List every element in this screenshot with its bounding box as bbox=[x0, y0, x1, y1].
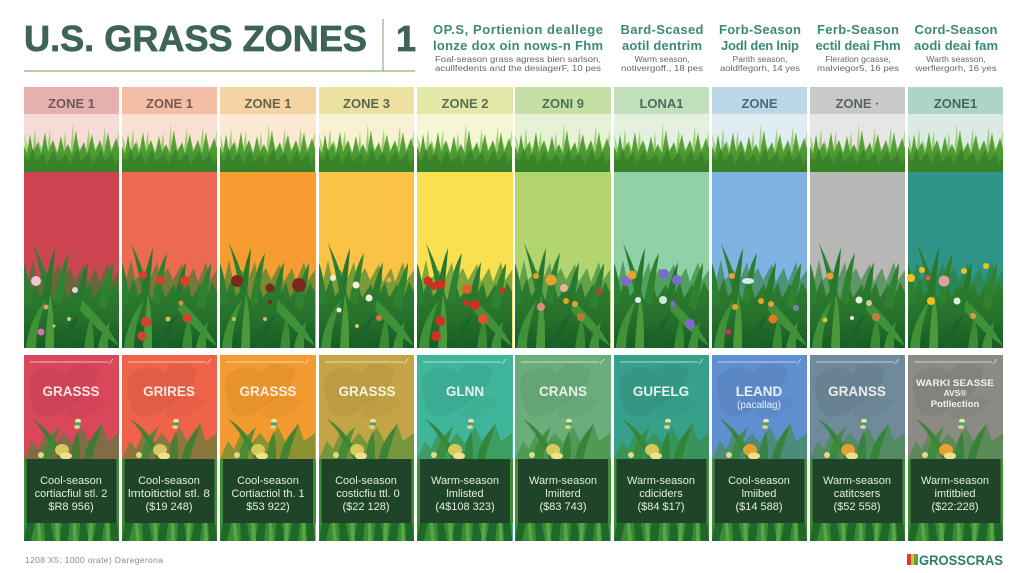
zone details: ($84 $17) bbox=[637, 501, 685, 513]
zone label: ZONE 3 bbox=[343, 96, 390, 111]
zone label: ZONE · bbox=[835, 96, 880, 111]
header column: Ferb-Season: ectil deai Fhm bbox=[816, 38, 900, 53]
zone column 1 bbox=[24, 87, 119, 348]
zone details bbox=[26, 459, 116, 523]
header column: Ferb-Season: Fleration gcasse, bbox=[825, 54, 891, 64]
zone label: ZONE1 bbox=[934, 96, 977, 111]
zone details: Cool-season bbox=[40, 475, 102, 487]
zone details: cdiciders bbox=[639, 488, 683, 500]
header column: Bard-Scased: aotil dentrim bbox=[622, 38, 702, 53]
intro text block: lonze dox oin nows-n Fhm bbox=[433, 38, 603, 53]
zone label: ZONE 2 bbox=[442, 96, 488, 111]
zone details bbox=[616, 459, 706, 523]
info panel 5 bbox=[417, 355, 513, 541]
zone details: ($22 128) bbox=[342, 501, 390, 513]
zone column 8 bbox=[712, 87, 807, 348]
grass name: AVS® bbox=[943, 388, 967, 398]
zone details bbox=[714, 459, 804, 523]
intro text block: acullfedents and the desiagerF, 10 pes bbox=[435, 63, 601, 73]
header column: Bard-Scased bbox=[620, 22, 704, 73]
header column: Forb-Season: Jodl den lnip bbox=[721, 38, 799, 53]
zone column 2 bbox=[122, 87, 217, 348]
header column: Ferb-Season: Ferb-Season bbox=[817, 22, 899, 37]
zone number: 1 bbox=[396, 18, 416, 59]
info panel 6 bbox=[515, 355, 611, 541]
zone details: Cortiactiol th. 1 bbox=[231, 488, 305, 500]
flowers bbox=[533, 273, 602, 321]
zone details: (4$108 323) bbox=[435, 501, 495, 513]
grass name: LEAND bbox=[736, 384, 782, 399]
zone details: ($83 743) bbox=[539, 501, 587, 513]
grass name bbox=[736, 384, 782, 411]
flowers bbox=[231, 275, 306, 321]
grass name: GRANSS bbox=[828, 384, 886, 399]
zone details bbox=[223, 459, 313, 523]
header column: Bard-Scased: Bard-Scased bbox=[620, 22, 704, 37]
grass name: GRASSS bbox=[338, 384, 396, 399]
header column: Ferb-Season bbox=[816, 22, 900, 73]
flowers bbox=[330, 275, 392, 328]
info panel 4 bbox=[319, 355, 414, 541]
grass name: (pacallag) bbox=[737, 400, 781, 411]
zone details: ($19 248) bbox=[145, 501, 193, 513]
intro text block bbox=[433, 22, 603, 73]
zone label: ZONI 9 bbox=[542, 96, 584, 111]
zone details: ($52 558) bbox=[833, 501, 881, 513]
zone details: ($22:228) bbox=[931, 501, 979, 513]
header column: Cord-Season: Cord-Season bbox=[914, 22, 998, 37]
zone details: lmlisted bbox=[446, 488, 484, 500]
zone details: $R8 956) bbox=[48, 501, 94, 513]
zone column 3 bbox=[220, 87, 316, 348]
header column: Forb-Season: Forb-Season bbox=[719, 22, 801, 37]
zone column 7 bbox=[614, 87, 709, 348]
zone label: LONA1 bbox=[639, 96, 684, 111]
info panel 10 bbox=[908, 355, 1003, 541]
zone column 4 bbox=[319, 87, 414, 348]
grass name bbox=[916, 378, 994, 410]
zone details: Warm-season bbox=[431, 475, 499, 487]
info panel 1 bbox=[24, 355, 119, 541]
header column: Bard-Scased: notivergoff., 18 pes bbox=[621, 63, 703, 73]
zone label: ZONE 1 bbox=[48, 96, 95, 111]
zone details: Cool-season bbox=[237, 475, 299, 487]
zone details: Cool-season bbox=[728, 475, 790, 487]
flowers bbox=[424, 276, 505, 341]
zone details bbox=[910, 459, 1000, 523]
flowers bbox=[138, 271, 192, 340]
zone details bbox=[322, 459, 412, 523]
zone column 6 bbox=[515, 87, 611, 348]
zone details: cortiacfiul stl. 2 bbox=[35, 488, 107, 500]
zone details: catitcsers bbox=[834, 488, 881, 500]
zone column 10 bbox=[907, 87, 1003, 348]
zone details: ($14 588) bbox=[735, 501, 783, 513]
intro text block: Foal-season grass agress bien sarlson, bbox=[435, 54, 601, 64]
zone details bbox=[518, 459, 608, 523]
header column: Cord-Season: werfiergorh, 16 yes bbox=[914, 63, 996, 73]
zone details: Warm-season bbox=[921, 475, 989, 487]
header column: Cord-Season: aodi deai fam bbox=[914, 38, 998, 53]
zone label: ZONE 1 bbox=[146, 96, 193, 111]
flowers bbox=[907, 263, 989, 319]
header column: Ferb-Season: malviegor5, 16 pes bbox=[817, 63, 899, 73]
zone column 9 bbox=[810, 87, 905, 348]
info panel 9 bbox=[810, 355, 905, 541]
flowers bbox=[822, 272, 880, 322]
header column: Forb-Season bbox=[719, 22, 801, 73]
header column: Forb-Season: aoldlfegorh, 14 yes bbox=[720, 63, 800, 73]
info panel 7 bbox=[614, 355, 709, 541]
info panel 2 bbox=[122, 355, 217, 541]
grass name: GLNN bbox=[446, 384, 484, 399]
zone details: Warm-season bbox=[823, 475, 891, 487]
zone details: costicfiu ttl. 0 bbox=[336, 488, 400, 500]
zone details: lmtoitictiol stl. 8 bbox=[128, 488, 210, 500]
zone details bbox=[812, 459, 902, 523]
zone details: $53 922) bbox=[246, 501, 290, 513]
grass name: GRASSS bbox=[239, 384, 297, 399]
grass name: WARKI SEASSE bbox=[916, 378, 994, 389]
zone label: ZONE bbox=[741, 96, 778, 111]
zone label: ZONE 1 bbox=[245, 96, 291, 111]
grass name: Potllection bbox=[931, 399, 979, 410]
footer note: 1208 X5: 1000 orate) Daregerona bbox=[25, 555, 163, 565]
logo: GROSSCRAS bbox=[919, 552, 1003, 568]
header column: Forb-Season: Parith season, bbox=[733, 54, 787, 64]
zone details: lmiibed bbox=[742, 488, 776, 500]
zone column 5 bbox=[417, 87, 513, 348]
grass name: GRASSS bbox=[42, 384, 100, 399]
header column: Bard-Scased: Warm season, bbox=[634, 54, 690, 64]
title: U.S. GRASS ZONES bbox=[24, 18, 367, 59]
flowers bbox=[621, 269, 695, 329]
zone details: Warm-season bbox=[627, 475, 695, 487]
zone details: Warm-season bbox=[529, 475, 597, 487]
zone details: Cool-season bbox=[335, 475, 397, 487]
zone details bbox=[420, 459, 510, 523]
grass name: CRANS bbox=[539, 384, 587, 399]
flowers bbox=[31, 276, 78, 336]
grass name: GUFELG bbox=[633, 384, 689, 399]
grass name: GRIRES bbox=[143, 384, 195, 399]
intro text block: OP.S, Portienion deallege bbox=[433, 22, 603, 37]
info panel 8 bbox=[712, 355, 807, 541]
header column: Cord-Season: Warth seasson, bbox=[926, 54, 986, 64]
zone details: imtitbied bbox=[935, 488, 975, 500]
header column: Cord-Season bbox=[914, 22, 998, 73]
flowers bbox=[725, 273, 799, 335]
zone details: lmiiterd bbox=[545, 488, 581, 500]
info panel 3 bbox=[220, 355, 316, 541]
zone details: Cool-season bbox=[138, 475, 200, 487]
zone details bbox=[124, 459, 214, 523]
